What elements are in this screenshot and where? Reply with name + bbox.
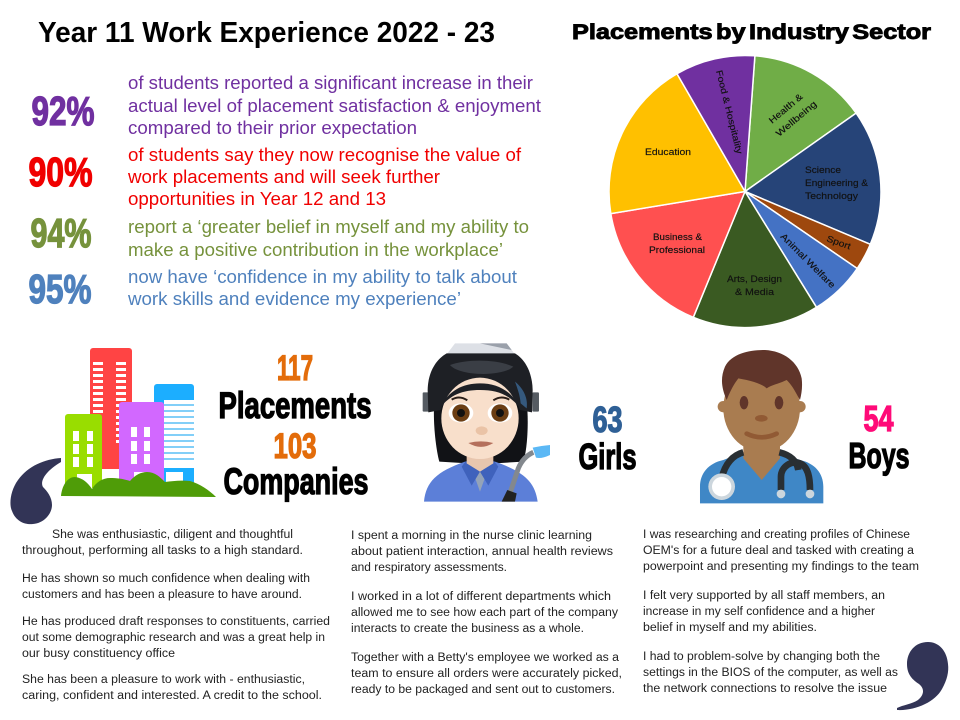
placement and company counts: Companies bbox=[224, 461, 368, 502]
panel: student quotes, placements: interacts to create the business as a whole. bbox=[351, 623, 584, 635]
pie labels: Food & Hospitality bbox=[714, 69, 745, 155]
pie labels: Education bbox=[645, 147, 691, 157]
panel: employer quotes bbox=[22, 529, 330, 702]
panel: student quotes, placements: about patient interaction, annual health reviews bbox=[351, 546, 613, 558]
girls count: 63 bbox=[592, 399, 622, 440]
pie labels: Science bbox=[805, 165, 841, 175]
panel: student quotes, placements: I worked in a lot of different departments which bbox=[351, 591, 611, 603]
panel: student quotes, skills: I was researching and creating profiles of Chinese bbox=[643, 529, 910, 541]
pie labels: Business & bbox=[653, 232, 702, 242]
stat: 95 percent: now have ‘confidence in my ability to talk about bbox=[128, 267, 517, 287]
panel: employer quotes: our busy constituency office bbox=[22, 648, 175, 660]
stat: 90 percent: 90% bbox=[28, 149, 92, 195]
stat: 95 percent: work skills and evidence my experience’ bbox=[127, 289, 461, 309]
panel: student quotes, placements: team to ensure all orders were accurately picked, bbox=[351, 668, 622, 680]
stat: 95 percent bbox=[28, 266, 517, 312]
stat: 92 percent: compared to their prior expectation bbox=[128, 118, 417, 138]
panel: student quotes, placements: and respiratory assessments. bbox=[351, 562, 507, 574]
placement and company counts: 117 bbox=[277, 349, 313, 388]
stat: 90 percent: of students say they now recognise the value of bbox=[128, 145, 522, 165]
stat: 90 percent: work placements and will seek further bbox=[127, 167, 440, 187]
panel: employer quotes: He has produced draft responses to constituents, carried bbox=[22, 616, 330, 628]
pie labels: Wellbeing bbox=[774, 99, 819, 139]
pie chart heading: Placements by Industry Sector bbox=[572, 20, 932, 44]
panel: student quotes, skills: powerpoint and presenting my findings to the team bbox=[643, 561, 919, 573]
stat: 94 percent: make a positive contribution in the workplace’ bbox=[128, 240, 503, 260]
panel: student quotes, placements: ready to be packaged and sent out to customers. bbox=[351, 684, 615, 696]
icon: city buildings bbox=[61, 348, 216, 497]
panel: student quotes, skills: settings in the BIOS of the computer, as well as bbox=[643, 667, 898, 679]
stat: 92 percent: 92% bbox=[32, 88, 94, 134]
pie labels bbox=[645, 69, 868, 297]
panel: employer quotes: caring, confident and interested. A credit to the school. bbox=[22, 690, 322, 702]
panel: employer quotes: customers and has been a pleasure to have around. bbox=[22, 589, 302, 601]
pie labels: Professional bbox=[649, 245, 705, 255]
panel: student quotes, skills: the network connections to resolve the issue bbox=[643, 683, 887, 695]
stat: 94 percent: report a ‘greater belief in myself and my ability to bbox=[128, 217, 529, 237]
stat: 90 percent bbox=[28, 145, 522, 209]
panel: employer quotes: She has been a pleasure to work with - enthusiastic, bbox=[22, 674, 305, 686]
pie labels: Animal Welfare bbox=[779, 231, 837, 290]
boys count: Boys bbox=[848, 435, 910, 476]
panel: key statistics bbox=[28, 73, 541, 312]
pie chart: placements by sector bbox=[609, 55, 881, 328]
stat: 94 percent bbox=[30, 210, 529, 260]
stat: 92 percent: of students reported a significant increase in their bbox=[128, 73, 533, 93]
panel: student quotes, placements: I spent a morning in the nurse clinic learning bbox=[351, 530, 592, 542]
icon: woman welder bbox=[423, 343, 550, 502]
panel: student quotes, skills: OEM's for a future deal and tasked with creating a bbox=[643, 545, 915, 557]
icon: opening quotation mark bbox=[10, 458, 61, 524]
stat: 92 percent bbox=[32, 73, 541, 138]
panel: student quotes, placements bbox=[351, 530, 622, 696]
icon: closing quotation mark bbox=[897, 642, 948, 710]
title: Year 11 Work Experience 2022 - 23 bbox=[38, 17, 495, 49]
girls count bbox=[578, 399, 636, 477]
panel: employer quotes: He has shown so much confidence when dealing with bbox=[22, 573, 310, 585]
panel: student quotes, skills: belief in myself and my abilities. bbox=[643, 622, 817, 634]
panel: employer quotes: out some demographic research and was a great help in bbox=[22, 632, 325, 644]
pie labels: Arts, Design bbox=[727, 274, 782, 284]
icon: male health worker bbox=[700, 350, 823, 503]
placement and company counts bbox=[218, 349, 372, 502]
stat: 90 percent: opportunities in Year 12 and 13 bbox=[128, 189, 386, 209]
boys count bbox=[848, 398, 910, 476]
panel: employer quotes: She was enthusiastic, diligent and thoughtful bbox=[52, 529, 293, 541]
pie labels: Technology bbox=[805, 191, 859, 201]
boys count: 54 bbox=[864, 398, 894, 439]
girls count: Girls bbox=[578, 436, 636, 477]
stat: 94 percent: 94% bbox=[30, 210, 92, 256]
stat: 92 percent: actual level of placement satisfaction & enjoyment bbox=[128, 96, 541, 116]
pie labels: Health & bbox=[767, 92, 805, 126]
panel: student quotes, skills: I felt very supported by all staff members, an bbox=[643, 590, 885, 602]
stat: 95 percent: 95% bbox=[28, 266, 92, 312]
panel: employer quotes: throughout, performing all tasks to a high standard. bbox=[22, 545, 303, 557]
panel: student quotes, skills: I had to problem-solve by changing both the bbox=[643, 651, 880, 663]
panel: student quotes, placements: allowed me to see how each part of the company bbox=[351, 607, 618, 619]
panel: student quotes, skills bbox=[643, 529, 919, 695]
pie labels: Sport bbox=[825, 233, 853, 252]
pie labels: Engineering & bbox=[805, 178, 868, 188]
placement and company counts: 103 bbox=[274, 427, 316, 466]
panel: student quotes, placements: Together with a Betty's employee we worked as a bbox=[351, 652, 620, 664]
placement and company counts: Placements bbox=[218, 385, 372, 426]
pie labels: & Media bbox=[735, 287, 774, 297]
panel: student quotes, skills: increase in my self confidence and a higher bbox=[643, 606, 875, 618]
